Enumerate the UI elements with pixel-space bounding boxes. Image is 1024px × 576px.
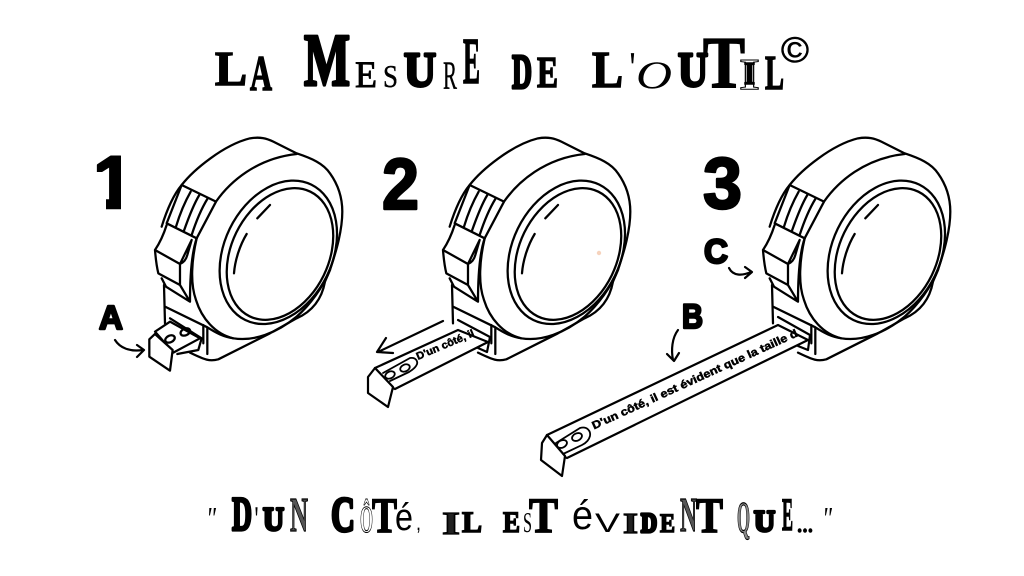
small dot [597,251,601,255]
quote caption: … [797,516,813,536]
title: © [781,29,809,70]
title: U [678,42,708,97]
arrow to A [115,340,144,357]
quote caption: L [462,506,482,539]
title: E [355,55,377,96]
title: E [463,25,480,98]
blade 2 [368,320,490,407]
quote caption: I [442,505,460,541]
quote caption: é [572,492,593,538]
quote caption: I [623,508,638,540]
title: S [383,58,398,94]
tape measure 3 [541,138,968,476]
title: I [739,50,760,99]
quote caption: S [523,508,532,539]
title: M [304,20,350,102]
arrow to B [667,330,679,361]
quote caption: T [372,487,397,543]
quote caption: U [263,502,284,538]
quote caption: T [529,487,558,543]
label A: A [99,299,123,336]
letter O drawn in thin slanted type: O [636,54,672,97]
quote caption: D [232,488,252,541]
arrow to C [729,267,752,278]
title [215,20,809,103]
title: A [250,45,272,101]
title: E [537,48,558,97]
quote caption: " [822,500,832,536]
title: T [703,22,745,103]
arrow pulling tape out [377,321,443,353]
quote caption: N [290,487,308,542]
title: L [765,45,784,100]
tape measure 1 [149,138,360,371]
quote caption: é [395,497,413,539]
step number 3: 3 [703,144,742,224]
label C: C [704,233,728,271]
blade 3: D'un côté, il est évident que la taille d [590,328,800,432]
step number 2: 2 [382,145,419,225]
quote caption: C [331,486,355,542]
blade 2: D'un côté, il [414,327,476,363]
quote caption: U [754,505,775,538]
quote caption: " [206,500,216,536]
quote caption: E [660,509,675,538]
title: R [443,53,457,98]
quote caption [206,486,832,543]
quote caption: V [595,508,620,538]
quote caption: E [503,506,520,539]
quote caption: Ô [360,498,373,541]
title: U [404,42,436,97]
blade 3 [541,317,810,476]
quote caption: T [696,487,723,543]
title: L [215,41,247,96]
title: D [512,44,532,99]
label B: B [682,298,703,336]
quote caption: D [641,508,657,538]
quote caption: E [782,489,793,541]
title: ' [630,44,635,89]
step number 1: 1 [93,141,134,224]
hook A [149,318,202,371]
quote caption: Q [737,493,750,542]
tape measure 2 [368,138,648,407]
quote caption: , [416,510,421,535]
quote caption: ' [255,503,258,534]
quote caption: N [680,487,697,542]
title: L [592,42,623,99]
title: I [744,55,755,91]
